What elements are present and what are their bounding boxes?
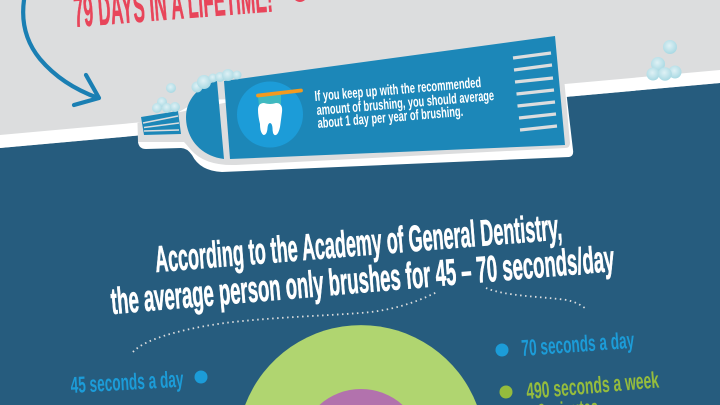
chart: concentric circles [245, 325, 477, 405]
tube body [224, 36, 565, 159]
nozzle [141, 111, 181, 135]
dotted connector: right [486, 288, 587, 310]
legend: 70 seconds a day [496, 327, 635, 361]
icon: tooth and toothbrush [237, 82, 303, 148]
foam on tube cap [192, 69, 242, 92]
legend: 490 seconds a week [500, 366, 660, 405]
legend: 70 seconds a day: 70 seconds a day [520, 327, 635, 361]
nozzle lines [143, 116, 179, 131]
arrow [23, 0, 99, 105]
foam bubbles on nozzle [152, 83, 180, 113]
dotted connector: left [133, 292, 437, 352]
tube white shadow [138, 90, 573, 172]
tube text: about 1 day per year of brushing. [317, 104, 464, 132]
tube text: If you keep up with the recommended [314, 75, 482, 105]
dark blue lower background [0, 83, 720, 405]
white band [0, 70, 720, 148]
foam bubbles on band [646, 40, 682, 81]
toothpaste tube [138, 34, 573, 172]
legend: 45 seconds a day [70, 366, 207, 398]
tube end lines [513, 53, 557, 130]
legend: 45 seconds a day: 45 seconds a day [70, 366, 184, 398]
tube cap [186, 81, 224, 159]
tube gray outline [138, 34, 570, 165]
red decorative fragment [295, 0, 305, 2]
tube text [314, 75, 495, 132]
tube text: amount of brushing, you should average [316, 88, 495, 119]
